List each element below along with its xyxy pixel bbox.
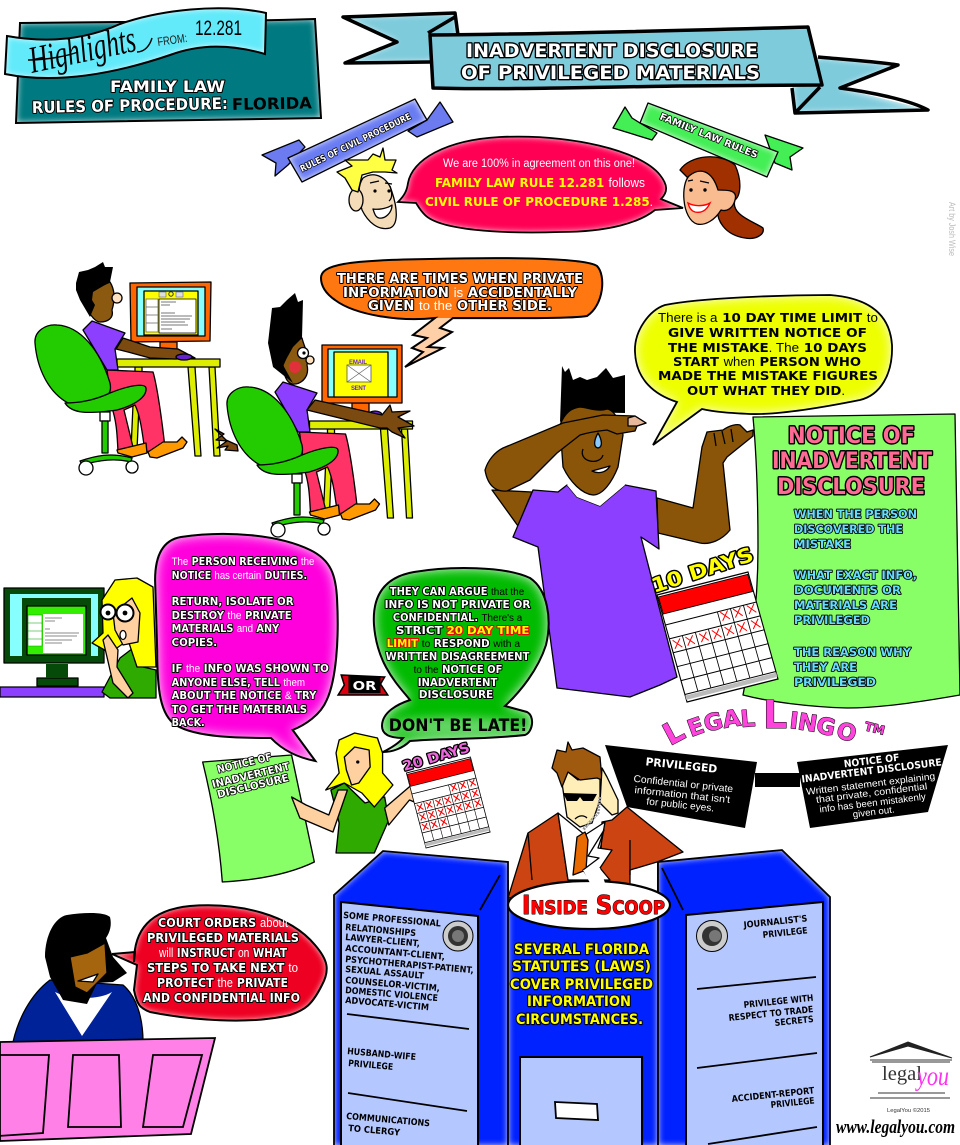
calendar: 20 days: 20 DAYS <box>401 740 472 775</box>
bubble text <box>143 915 300 1005</box>
speech bubble: duties of person receiving notice <box>155 534 338 761</box>
definition text: given out. <box>852 805 895 821</box>
left cabinet privilege list: COUNSELOR-VICTIM, <box>345 976 440 994</box>
left cabinet privilege list: RELATIONSHIPS <box>345 923 416 939</box>
bubble text: GIVE WRITTEN NOTICE OF <box>668 325 867 340</box>
heading: legal lingo: G <box>701 708 726 738</box>
logo: legal you: you <box>915 1061 949 1091</box>
left cabinet privilege list: SOME PROFESSIONAL <box>343 911 441 930</box>
statutes text <box>510 942 653 1028</box>
left cabinet privilege list: SEXUAL ASSAULT <box>345 965 425 982</box>
speech bubble: inside scoop <box>508 830 670 929</box>
banner: privileged definition <box>605 745 800 828</box>
bubble text: NOTICE has certain DUTIES. <box>172 569 307 582</box>
heading: legal lingo: L <box>657 713 691 753</box>
banner left tail <box>343 13 458 63</box>
definition text: Written statement explaining <box>806 771 936 798</box>
notice heading: NOTICE OF <box>788 424 915 449</box>
ribbon: highlights from 12.281: 12.281 <box>195 17 242 40</box>
statutes text: CIRCUMSTANCES. <box>516 1012 643 1028</box>
ribbon: rules of civil procedure: RULES OF CIVIL PROCEDURE <box>299 112 413 175</box>
credit: art by josh wise: Art by Josh Wise <box>947 202 957 256</box>
bubble text: There is a 10 DAY TIME LIMIT to <box>658 310 878 325</box>
heading: family law rules of procedure: FLORIDA <box>232 93 313 114</box>
right cabinet privilege list: JOURNALIST'S <box>742 914 808 931</box>
scene: person accidentally sends email <box>215 293 414 537</box>
heading: family law rules of procedure: RULES OF PROCEDURE: <box>32 94 228 117</box>
bubble text: INFORMATION is ACCIDENTALLY <box>343 285 578 301</box>
banner right tail <box>792 57 928 113</box>
bubble text: BACK. <box>172 716 205 729</box>
notice heading: DISCLOSURE <box>777 475 925 500</box>
banner: main title <box>343 13 928 113</box>
notice requirements list: DISCOVERED THE <box>794 522 903 536</box>
heading: legal lingo: N <box>796 709 819 738</box>
bubble text <box>337 272 583 314</box>
right cabinet privilege list <box>728 914 816 1111</box>
character: large man wiping a tear <box>485 366 753 697</box>
bubble text: COPIES. <box>172 636 217 649</box>
left cabinet privilege list: PRIVILEGE <box>348 1059 393 1073</box>
bubble text: THE MISTAKE . The 10 DAYS <box>668 340 867 355</box>
speech bubble: 10 day time limit <box>635 295 892 445</box>
drawer <box>520 1057 642 1145</box>
ribbon: family law rules <box>613 103 803 177</box>
ribbon: rules of civil procedure <box>262 99 453 182</box>
judge's bench <box>0 1038 215 1141</box>
heading: legal lingo: TM <box>863 719 886 738</box>
centre cabinet <box>508 862 658 1145</box>
right cabinet privilege list: RESPECT TO TRADE <box>728 1005 814 1024</box>
heading: legal lingo: L <box>740 706 756 733</box>
calendar: 10 days <box>648 542 778 702</box>
notice title: NOTICE OF <box>216 750 273 776</box>
character: judge <box>13 913 143 1042</box>
notice requirements list <box>794 507 917 689</box>
definition text <box>801 753 942 821</box>
worried blonde woman <box>92 578 156 698</box>
person's shirt, arm, hand and head <box>215 293 414 451</box>
speech bubble: court orders <box>112 905 327 1021</box>
bubble text: ANYONE ELSE, TELL them <box>172 676 305 689</box>
bubble text <box>385 585 530 735</box>
heading: family law rules of procedure: FAMILY LAW <box>110 77 225 96</box>
bubble text: ABOUT THE NOTICE & TRY <box>172 689 317 702</box>
right cabinet <box>658 850 830 1145</box>
statutes text: INFORMATION <box>527 994 631 1010</box>
left cabinet privilege list: DOMESTIC VIOLENCE <box>345 986 438 1004</box>
bubble text: RETURN, ISOLATE OR <box>172 595 294 608</box>
definition text: that private, confidential <box>815 781 928 806</box>
lock <box>443 921 473 951</box>
monitor <box>0 588 104 697</box>
heading: legal lingo: I <box>788 708 800 735</box>
left cabinet privilege list: HUSBAND-WIFE <box>347 1047 416 1063</box>
character: lawyer on the phone <box>508 742 683 898</box>
definition text <box>633 755 734 815</box>
notice requirements list: THEY ARE <box>794 660 857 674</box>
bubble text: DESTROY the PRIVATE <box>172 609 292 622</box>
bubble text: AND CONFIDENTIAL INFO <box>143 990 300 1005</box>
bubble text: START when PERSON WHO <box>673 354 861 369</box>
notice heading: INADVERTENT <box>772 449 932 474</box>
panel: highlights header <box>5 8 321 123</box>
statutes text: SEVERAL FLORIDA <box>514 942 650 958</box>
bubble text <box>425 158 653 209</box>
character: red-haired woman <box>680 157 763 238</box>
notice title: INADVERTENT <box>211 760 292 791</box>
monitor: email sent: EMAIL <box>349 360 367 366</box>
definition text: information that isn't <box>634 785 731 806</box>
ribbon: or <box>338 675 388 695</box>
heading: legal lingo: L <box>763 693 787 737</box>
calendar: 10 days: 10 DAYS <box>648 542 756 598</box>
bubble text: CONFIDENTIAL. There's a <box>393 611 522 624</box>
bubble text: to the NOTICE OF <box>414 663 503 676</box>
notice requirements list: WHAT EXACT INFO, <box>794 568 917 582</box>
bubble text: THERE ARE TIMES WHEN PRIVATE <box>337 272 583 287</box>
statutes text: STATUTES (LAWS) <box>512 959 651 975</box>
bubble text: The PERSON RECEIVING the <box>172 555 314 568</box>
title text <box>461 40 760 84</box>
definition text: NOTICE OF <box>843 753 900 770</box>
left cabinet privilege list: ADVOCATE-VICTIM <box>345 996 429 1013</box>
bubble text: IF the INFO WAS SHOWN TO <box>172 662 329 675</box>
right cabinet privilege list: ACCIDENT-REPORT <box>731 1086 816 1105</box>
left cabinet privilege list: ACCOUNTANT-CLIENT, <box>345 944 445 963</box>
notice requirements list: PRIVILEGED <box>794 613 870 627</box>
bubble text: WRITTEN DISAGREEMENT <box>386 650 530 663</box>
character: blond man <box>337 148 397 229</box>
document: notice held by woman <box>203 750 314 882</box>
ribbon: family law rules: FAMILY LAW RULES <box>658 112 759 161</box>
monitor: email sent: SENT <box>351 386 366 392</box>
monitor with email program <box>130 282 211 350</box>
heading: legal lingo: E <box>684 713 708 743</box>
bubble text <box>172 555 329 729</box>
ribbon: highlights from 12.281: FROM: <box>156 31 188 49</box>
banner: notice of inadvertent disclosure definition <box>797 745 948 828</box>
heading: legal lingo: O <box>833 718 859 748</box>
bubble text: MADE THE MISTAKE FIGURES <box>658 368 878 383</box>
character: blonde woman in green with notice <box>292 733 417 853</box>
definition text: PRIVILEGED <box>645 755 718 776</box>
heading: family law rules of procedure <box>32 77 313 117</box>
right cabinet privilege list: PRIVILEGE <box>762 926 808 941</box>
bubble text: DON'T BE LATE! <box>389 715 527 735</box>
right cabinet privilege list: PRIVILEGE <box>770 1096 815 1111</box>
ribbon: highlights from 12.281: Highlights <box>24 18 140 82</box>
notice requirements list: THE REASON WHY <box>794 645 912 659</box>
bubble text: THEY CAN ARGUE that the <box>390 585 524 598</box>
speech bubble: they can argue, don't be late <box>374 568 549 752</box>
left cabinet privilege list: LAWYER-CLIENT, <box>345 933 420 950</box>
logo: legal you: legal <box>882 1063 922 1085</box>
notice heading <box>772 424 932 500</box>
scene: person at computer <box>35 262 220 475</box>
bubble text: STEPS TO TAKE NEXT to <box>147 960 298 975</box>
bubble text: We are 100% in agreement on this one! <box>443 158 635 170</box>
bubble text: GIVEN to the OTHER SIDE. <box>368 298 552 314</box>
bubble text: CIVIL RULE OF PROCEDURE 1.285. <box>425 194 653 209</box>
left cabinet <box>334 851 508 1145</box>
bubble text: DISCLOSURE <box>419 688 493 701</box>
notice requirements list: MATERIALS ARE <box>794 598 897 612</box>
monitor: email sent <box>322 345 402 414</box>
left cabinet privilege list: COMMUNICATIONS <box>346 1112 430 1129</box>
bubble text: PROTECT the PRIVATE <box>157 975 288 990</box>
ribbon: highlights from 12.281 <box>5 8 266 82</box>
title text: OF PRIVILEGED MATERIALS <box>461 62 760 84</box>
notice requirements list: WHEN THE PERSON <box>794 507 917 521</box>
definition text: Confidential or private <box>633 774 734 795</box>
bubble text: TO GET THE MATERIALS <box>172 703 307 716</box>
left cabinet privilege list <box>343 911 474 1139</box>
speech bubble: private information accidentally given <box>321 258 602 367</box>
definition text: info has been mistakenly <box>819 792 927 815</box>
title text: INADVERTENT DISCLOSURE <box>466 40 758 62</box>
definition text: for public eyes. <box>646 796 715 815</box>
filing cabinets <box>334 850 830 1145</box>
bubble text: INFO IS NOT PRIVATE OR <box>385 598 530 611</box>
notice title: DISCLOSURE <box>216 771 290 801</box>
speech bubble: inside scoop: INSIDE SCOOP <box>522 891 665 921</box>
bubble text <box>658 310 878 398</box>
logo: legal you: LegalYou ©2015 <box>887 1107 930 1114</box>
panel: notice of inadvertent disclosure <box>743 414 960 708</box>
heading: legal lingo <box>657 693 886 753</box>
left cabinet privilege list: PSYCHOTHERAPIST-PATIENT, <box>345 955 474 976</box>
right cabinet privilege list: SECRETS <box>774 1015 814 1029</box>
notice title <box>211 750 292 801</box>
calendar: 20 days <box>401 740 490 848</box>
heading: legal lingo: A <box>721 705 743 734</box>
right cabinet privilege list: PRIVILEGE WITH <box>743 994 814 1011</box>
bubble text: LIMIT to RESPOND with a <box>387 637 520 650</box>
heading: legal lingo: G <box>814 713 838 742</box>
bubble text: COURT ORDERS about <box>158 915 288 930</box>
person's shirt, arm and head <box>76 262 195 370</box>
notice requirements list: PRIVILEGED <box>794 675 876 689</box>
ribbon: or: OR <box>353 679 377 693</box>
statutes text: COVER PRIVILEGED <box>510 977 653 993</box>
bubble text: PRIVILEGED MATERIALS <box>147 930 299 945</box>
logo: legal you <box>870 1042 952 1114</box>
scene: woman at monitor reading notice <box>0 578 156 698</box>
bubble text: STRICT 20 DAY TIME <box>396 624 529 637</box>
lock <box>696 920 728 952</box>
bubble text: will INSTRUCT on WHAT <box>158 945 287 960</box>
bubble text: OUT WHAT THEY DID . <box>687 383 845 398</box>
definition text: INADVERTENT DISCLOSURE <box>801 757 942 786</box>
notice requirements list: DOCUMENTS OR <box>794 583 901 597</box>
bubble text: MATERIALS and ANY <box>172 622 280 635</box>
bubble text: INADVERTENT <box>418 676 498 689</box>
bubble text: FAMILY LAW RULE 12.281 follows <box>435 175 645 190</box>
left cabinet privilege list: TO CLERGY <box>348 1124 401 1139</box>
notice requirements list: MISTAKE <box>794 537 851 551</box>
speech bubble: 100% in agreement <box>398 137 683 232</box>
